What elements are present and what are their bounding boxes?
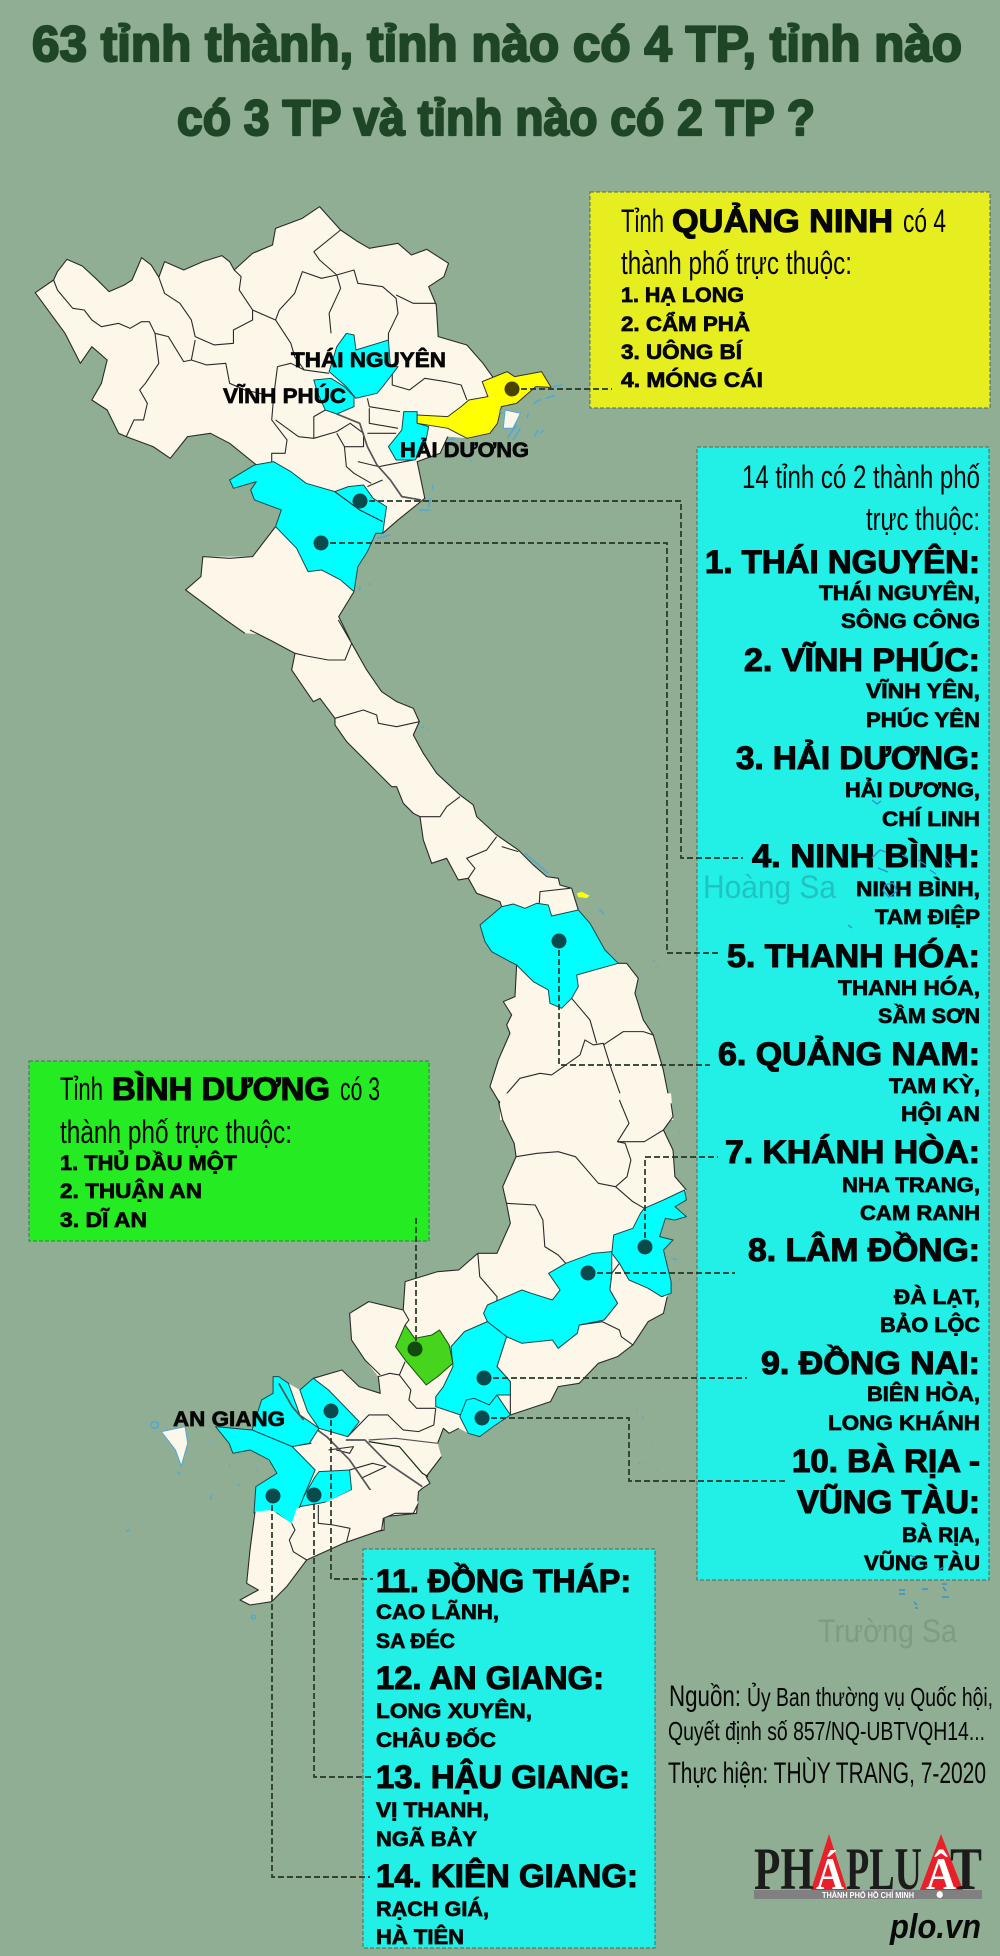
map labels: THÁI NGUYÊN xyxy=(291,348,446,372)
list: cities of Bình Dương: 3. DĨ AN xyxy=(60,1209,147,1232)
entry: Hải Dương xyxy=(736,740,980,831)
entry: Đồng Tháp xyxy=(376,1563,631,1653)
province: Đồng Nai xyxy=(436,1322,510,1415)
entry: Ninh Bình: NINH BÌNH, xyxy=(856,878,980,901)
map of Vietnam xyxy=(35,207,686,1619)
panel heading: Bình Dương: BÌNH DƯƠNG xyxy=(112,1071,330,1107)
label: Hoàng Sa with islets: Hoàng Sa xyxy=(703,869,836,905)
panel heading: 14 provinces xyxy=(742,459,980,537)
entry: Thanh Hóa: 5. THANH HÓA: xyxy=(727,938,980,974)
entry: Đồng Nai: BIÊN HÒA, xyxy=(867,1382,980,1406)
panel heading: Quảng Ninh: thành phố trực thuộc: xyxy=(621,245,852,281)
entry: An Giang: CHÂU ĐỐC xyxy=(376,1728,496,1752)
entry: Vĩnh Phúc xyxy=(744,642,980,732)
entry: Khánh Hòa xyxy=(725,1134,980,1225)
list: cities of Quảng Ninh: 1. HẠ LONG xyxy=(621,284,744,307)
entry: Bà Rịa - Vũng Tàu: VŨNG TÀU xyxy=(864,1551,980,1575)
entry: Bà Rịa - Vũng Tàu: VŨNG TÀU: xyxy=(797,1484,980,1520)
entry: An Giang: LONG XUYÊN, xyxy=(376,1699,532,1723)
map: central region xyxy=(250,620,673,1120)
entry: Kiên Giang xyxy=(376,1858,638,1949)
panel heading: Quảng Ninh: QUẢNG NINH xyxy=(672,203,893,239)
entry: Quảng Nam: HỘI AN xyxy=(901,1102,980,1126)
panel heading: Bình Dương: có 3 xyxy=(340,1071,380,1107)
entry: Vĩnh Phúc: VĨNH YÊN, xyxy=(866,679,980,703)
entry: Hậu Giang xyxy=(376,1759,630,1851)
entry: Đồng Nai: LONG KHÁNH xyxy=(828,1412,980,1435)
entry: Vĩnh Phúc: 2. VĨNH PHÚC: xyxy=(744,642,980,678)
map labels: HẢI DƯƠNG xyxy=(400,439,529,462)
entry: Kiên Giang: HÀ TIÊN xyxy=(376,1925,464,1949)
entry: Kiên Giang: RẠCH GIÁ, xyxy=(376,1898,489,1921)
province: Đồng Tháp xyxy=(300,1378,359,1437)
entry: Khánh Hòa: NHA TRANG, xyxy=(842,1174,980,1197)
province: Thái Nguyên xyxy=(329,333,398,398)
map labels: VĨNH PHÚC xyxy=(223,384,346,408)
panel heading: Bình Dương xyxy=(60,1071,380,1150)
entry: Lâm Đồng: 8. LÂM ĐỒNG: xyxy=(748,1232,980,1268)
province: Lâm Đồng xyxy=(484,1252,618,1348)
logo: Pháp Luật: Ậ xyxy=(926,1848,956,1899)
label: Hoàng Sa with islets xyxy=(703,800,951,928)
entry: Bà Rịa - Vũng Tàu xyxy=(792,1443,980,1575)
location dots xyxy=(266,382,652,1504)
river: Hậu channel over An Giang xyxy=(279,1383,304,1420)
entry: Bà Rịa - Vũng Tàu: BÀ RỊA, xyxy=(902,1524,980,1547)
entry: Quảng Nam: TAM KỲ, xyxy=(889,1074,980,1098)
panel: provinces 1 to 10 xyxy=(697,447,989,1580)
list: cities of Bình Dương: 2. THUẬN AN xyxy=(60,1179,202,1203)
entry: Hậu Giang: VỊ THANH, xyxy=(376,1799,489,1822)
panel heading: Quảng Ninh: có 4 xyxy=(903,203,946,239)
province: An Giang xyxy=(252,1377,319,1447)
list: cities of Quảng Ninh: 2. CẨM PHẢ xyxy=(621,313,750,336)
entry: Kiên Giang: 14. KIÊN GIANG: xyxy=(376,1858,638,1894)
list: cities of Quảng Ninh xyxy=(621,284,763,392)
entry: Hải Dương: 3. HẢI DƯƠNG: xyxy=(736,740,980,776)
connector lines xyxy=(272,389,786,1877)
panel heading: Bình Dương: Tỉnh xyxy=(60,1071,103,1107)
province: Ninh Bình and Thanh Hóa xyxy=(230,462,387,592)
entry: Bà Rịa - Vũng Tàu: 10. BÀ RỊA - xyxy=(792,1443,980,1479)
entry: Khánh Hòa: CAM RANH xyxy=(860,1202,980,1225)
entry: Hải Dương: CHÍ LINH xyxy=(882,808,980,831)
panel heading: Quảng Ninh: Tỉnh xyxy=(621,203,664,239)
logo: Pháp Luật: PLU xyxy=(846,1836,922,1902)
entry: Ninh Bình: TAM ĐIỆP xyxy=(875,905,980,929)
province: Quảng Nam xyxy=(480,903,618,1008)
entry: Khánh Hòa: 7. KHÁNH HÒA: xyxy=(725,1134,980,1170)
list: cities of Quảng Ninh: 3. UÔNG BÍ xyxy=(621,340,743,364)
province: Hậu Giang xyxy=(300,1470,352,1507)
logo: Pháp Luật: THÀNH PHỐ HỒ CHÍ MINH xyxy=(822,1890,914,1900)
map labels: AN GIANG xyxy=(173,1408,285,1431)
entry: An Giang xyxy=(376,1660,604,1752)
entry: Quảng Nam xyxy=(718,1036,980,1126)
province: Quảng Ninh xyxy=(417,372,551,438)
entry: Thái Nguyên xyxy=(705,544,980,633)
entry: Ninh Bình: 4. NINH BÌNH: xyxy=(752,838,980,874)
entry: Thái Nguyên: THÁI NGUYÊN, xyxy=(819,581,980,605)
province: Vĩnh Phúc xyxy=(314,378,354,414)
map labels xyxy=(173,348,529,1431)
entry: Hậu Giang: 13. HẬU GIANG: xyxy=(376,1759,630,1795)
title xyxy=(32,16,962,146)
map: northern region xyxy=(35,207,563,640)
entry: Hải Dương: HẢI DƯƠNG, xyxy=(845,779,980,802)
entry: Đồng Tháp: SA ĐÉC xyxy=(376,1630,455,1653)
entry: Thái Nguyên: SÔNG CÔNG xyxy=(841,609,980,633)
logo: Pháp Luật: Á xyxy=(816,1848,844,1899)
entry: An Giang: 12. AN GIANG: xyxy=(376,1660,604,1696)
label: Trường Sa with islets xyxy=(818,1555,957,1649)
website: plo.vn: plo.vn xyxy=(889,1908,981,1946)
entry: Thái Nguyên: 1. THÁI NGUYÊN: xyxy=(705,544,980,580)
list: cities of Bình Dương xyxy=(60,1151,237,1232)
entry: Đồng Nai: 9. ĐỒNG NAI: xyxy=(761,1345,980,1381)
province: Hải Dương xyxy=(388,412,429,460)
islands: central coast xyxy=(422,722,658,966)
entry: Đồng Nai xyxy=(761,1345,980,1435)
map: Cà Mau peninsula xyxy=(240,1490,418,1619)
entry: Đồng Tháp: CAO LÃNH, xyxy=(376,1601,499,1624)
label: Trường Sa with islets: Trường Sa xyxy=(818,1613,957,1649)
entry: Quảng Nam: 6. QUẢNG NAM: xyxy=(718,1036,980,1072)
entry: Lâm Đồng: BẢO LỘC xyxy=(880,1313,980,1337)
panel heading: Quảng Ninh xyxy=(621,203,946,281)
source and credit: Nguồn: xyxy=(669,1680,741,1713)
entry: Vĩnh Phúc: PHÚC YÊN xyxy=(866,708,980,732)
panel: Bình Dương xyxy=(29,1061,429,1241)
logo: Pháp Luật xyxy=(754,1834,982,1902)
logo: Pháp Luật: PH xyxy=(754,1836,814,1902)
entry: Lâm Đồng: ĐÀ LẠT, xyxy=(894,1286,980,1309)
entry: Ninh Bình xyxy=(752,838,980,929)
island: Phú Quốc and islets xyxy=(126,1132,680,1532)
province: Bà Rịa - Vũng Tàu xyxy=(460,1395,510,1437)
list: cities of Bình Dương: 1. THỦ DẦU MỘT xyxy=(60,1151,237,1175)
title: 63 tỉnh thành, tỉnh nào có 4 TP, tỉnh nào xyxy=(32,16,962,72)
entry: Lâm Đồng xyxy=(748,1232,980,1337)
entry: Thanh Hóa xyxy=(727,938,980,1028)
panel: provinces 11 to 14 xyxy=(363,1549,655,1949)
map: southern region xyxy=(126,1093,686,1560)
panel heading: Bình Dương: thành phố trực thuộc: xyxy=(60,1114,292,1150)
entry: Thanh Hóa: THANH HÓA, xyxy=(838,976,980,1000)
entry: Hậu Giang: NGÃ BẢY xyxy=(376,1828,477,1851)
panel: Quảng Ninh xyxy=(590,192,990,408)
title: có 3 TP và tỉnh nào có 2 TP ? xyxy=(177,90,815,146)
entry: Đồng Tháp: 11. ĐỒNG THÁP: xyxy=(376,1563,631,1599)
source and credit xyxy=(668,1680,993,1790)
list: cities of Quảng Ninh: 4. MÓNG CÁI xyxy=(621,368,763,392)
entry: Thanh Hóa: SẦM SƠN xyxy=(878,1005,980,1028)
province: Kiên Giang xyxy=(216,1427,315,1525)
logo: Pháp Luật: T xyxy=(950,1836,982,1902)
islands: Hạ Long bay xyxy=(360,385,563,591)
province: Bình Dương xyxy=(396,1325,453,1385)
province: Khánh Hòa xyxy=(612,1190,686,1297)
